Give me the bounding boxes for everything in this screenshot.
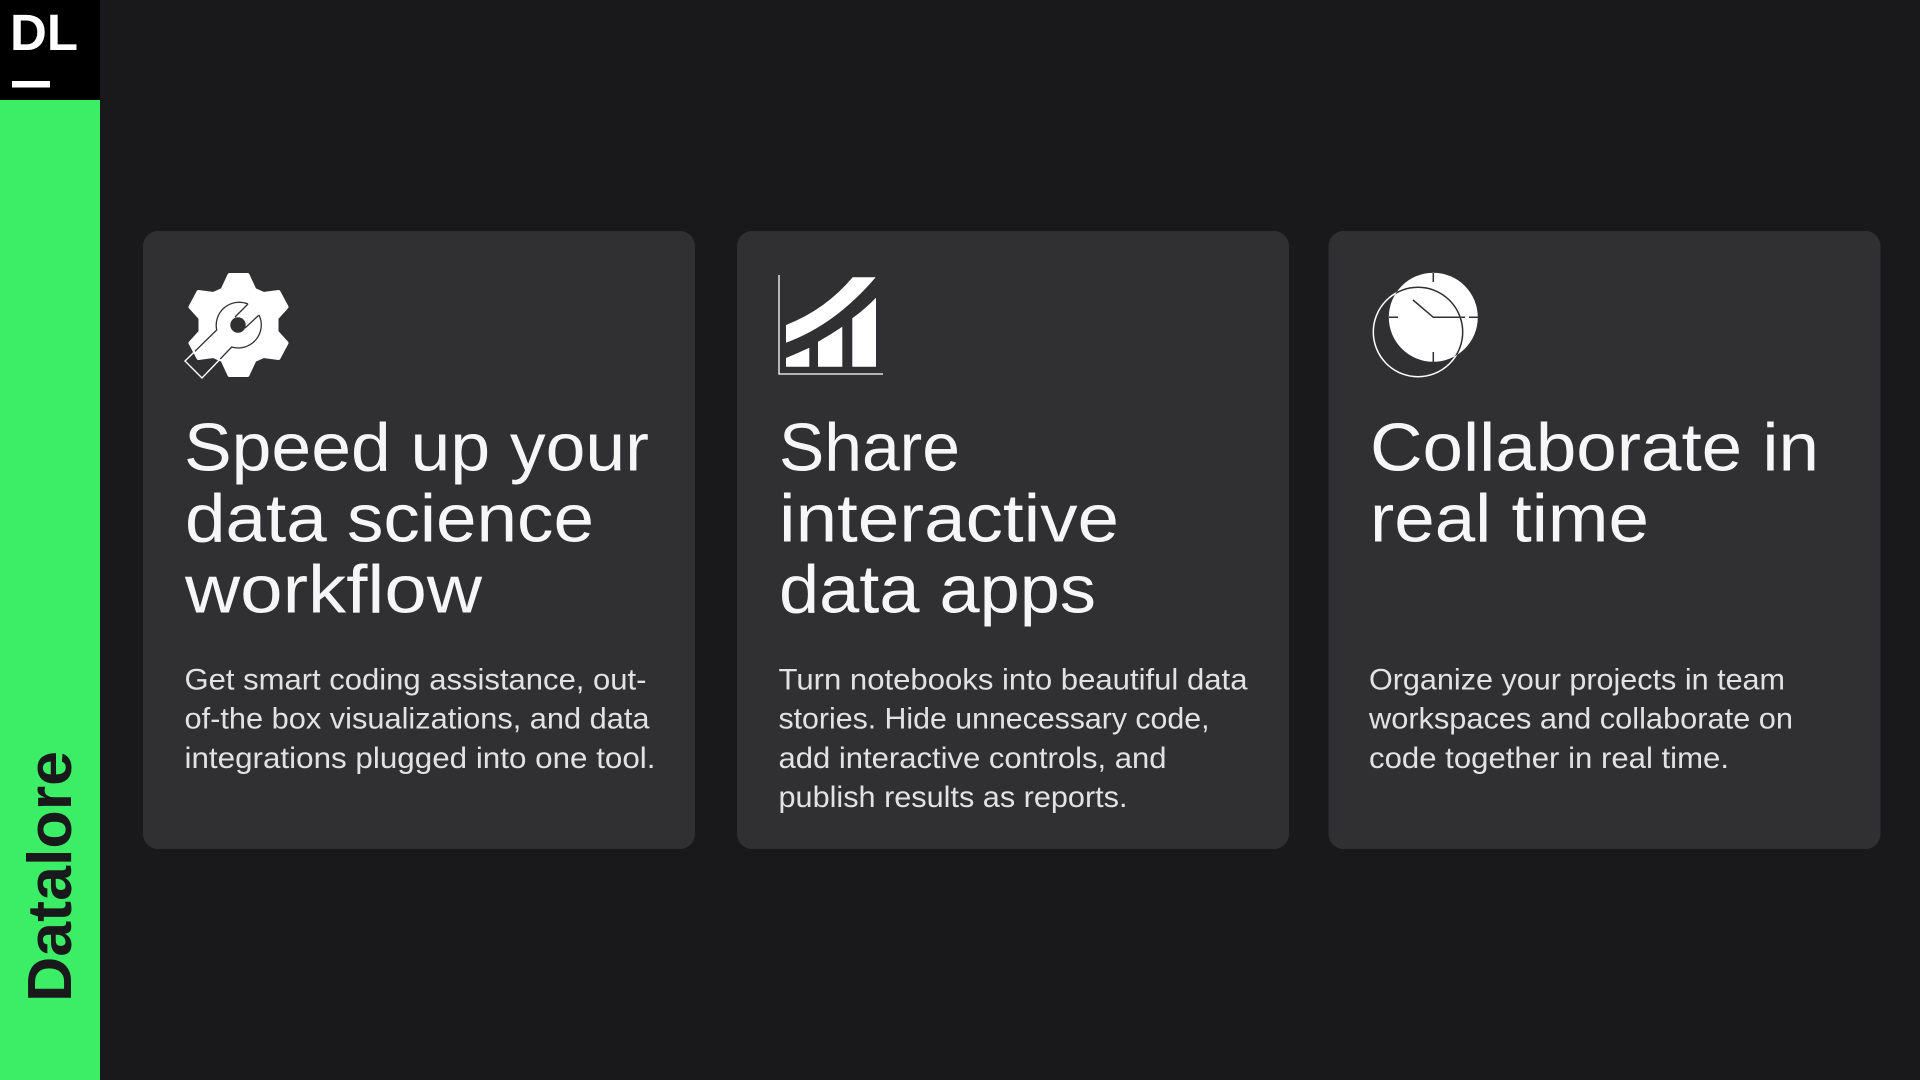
heading: Collaborate in [1370, 410, 1819, 486]
panel: collaborate [1328, 231, 1880, 849]
brand name: Datalore: Datalore [16, 751, 85, 1002]
heading: Share [779, 410, 960, 486]
body text: integrations plugged into one tool. [184, 742, 656, 775]
body text: stories. Hide unnecessary code, [778, 703, 1210, 736]
icon: clock [1373, 273, 1478, 377]
logo: DL [0, 0, 100, 100]
heading [779, 410, 1119, 628]
icon: growth chart [779, 275, 883, 374]
body text: publish results as reports. [778, 781, 1128, 814]
heading: data apps [779, 552, 1096, 628]
logo: DL: DL [10, 4, 78, 61]
body text: add interactive controls, and [778, 742, 1166, 775]
body text [778, 664, 1248, 814]
panel: speed up workflow [143, 231, 695, 849]
sidebar [0, 0, 100, 1080]
body text: workspaces and collaborate on [1368, 703, 1793, 736]
heading [1370, 410, 1819, 556]
heading: real time [1370, 480, 1649, 556]
heading: interactive [779, 480, 1119, 556]
body text [184, 664, 656, 775]
panel: share data apps [737, 231, 1289, 849]
body text: code together in real time. [1369, 742, 1729, 775]
heading: data science [185, 480, 594, 556]
body text: Turn notebooks into beautiful data [778, 664, 1248, 696]
body text [1368, 664, 1793, 775]
body text: Get smart coding assistance, out- [184, 664, 646, 696]
green sidebar band [0, 0, 100, 1080]
icon: gear and wrench [185, 275, 286, 378]
heading: workflow [184, 552, 483, 628]
heading [184, 410, 649, 628]
body text: Organize your projects in team [1369, 664, 1785, 696]
heading: Speed up your [184, 410, 649, 486]
body text: of-the box visualizations, and data [184, 703, 650, 736]
